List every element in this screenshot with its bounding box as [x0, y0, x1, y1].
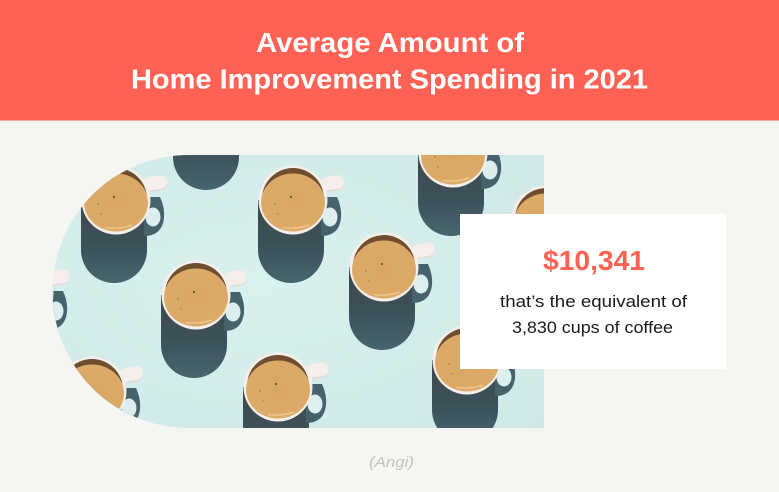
callout card [460, 214, 726, 369]
equivalent text: that’s the equivalent of [500, 292, 687, 311]
photo: overhead coffee cups in a rounded-left frame [52, 155, 544, 428]
source: (Angi) [369, 455, 414, 471]
title: Home Improvement Spending in 2021 [131, 64, 648, 94]
title: Average Amount of [256, 27, 525, 58]
equivalent text: 3,830 cups of coffee [512, 318, 673, 337]
amount: $10,341 [543, 245, 645, 276]
header banner [0, 0, 779, 120]
